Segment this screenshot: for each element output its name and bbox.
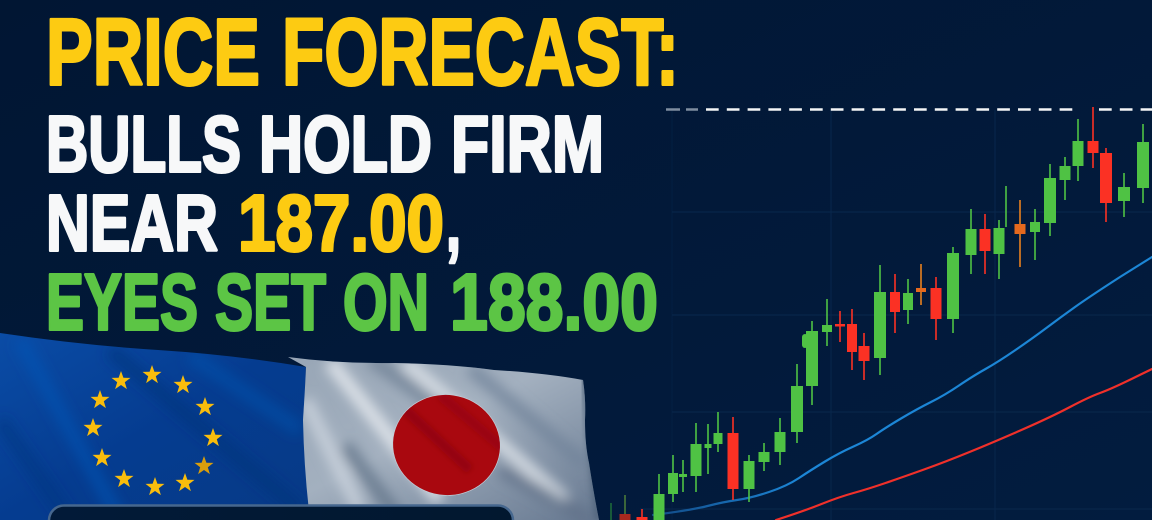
bottom panel <box>49 506 513 520</box>
title line 2: bulls hold firm <box>46 100 604 188</box>
doji and orange candles <box>916 200 1026 305</box>
bearish candles <box>636 107 1112 520</box>
chart grid <box>640 110 1152 520</box>
fabric shading: Japan flag <box>300 358 600 520</box>
chart: candlestick price chart <box>611 107 1152 520</box>
title line 2: bulls hold firm: BULLS <box>46 100 241 188</box>
title line 3: near 187.00: NEAR <box>46 178 218 268</box>
flag: European Union <box>0 333 311 520</box>
EU stars ring <box>84 365 222 495</box>
title line 1: price forecast: FORECAST: <box>282 0 679 106</box>
faded candles lower left <box>611 495 630 520</box>
moving average: blue <box>653 257 1152 515</box>
title line 4: eyes set on 188.00: 188.00 <box>450 258 658 346</box>
title line 4: eyes set on 188.00: ON <box>343 258 429 346</box>
title line 3: near 187.00: 187.00 <box>238 178 444 268</box>
fabric shading: EU flag <box>0 347 300 504</box>
bullish candles <box>654 119 1149 520</box>
title line 4: eyes set on 188.00: EYES <box>46 258 198 346</box>
title line 3: near 187.00 <box>46 178 461 268</box>
title <box>46 0 679 346</box>
moving average: red <box>776 369 1152 520</box>
title line 2: bulls hold firm: FIRM <box>451 100 604 188</box>
title line 1: price forecast <box>46 0 679 106</box>
title line 3: near 187.00: , <box>446 178 461 268</box>
title line 4: eyes set on 188.00 <box>46 258 658 346</box>
Japan red disc <box>392 394 500 496</box>
title line 1: price forecast: PRICE <box>46 0 260 106</box>
flag: Japan <box>288 357 600 520</box>
title line 2: bulls hold firm: HOLD <box>259 100 432 188</box>
resistance dashed line <box>666 108 1152 111</box>
title line 4: eyes set on 188.00: SET <box>215 258 326 346</box>
